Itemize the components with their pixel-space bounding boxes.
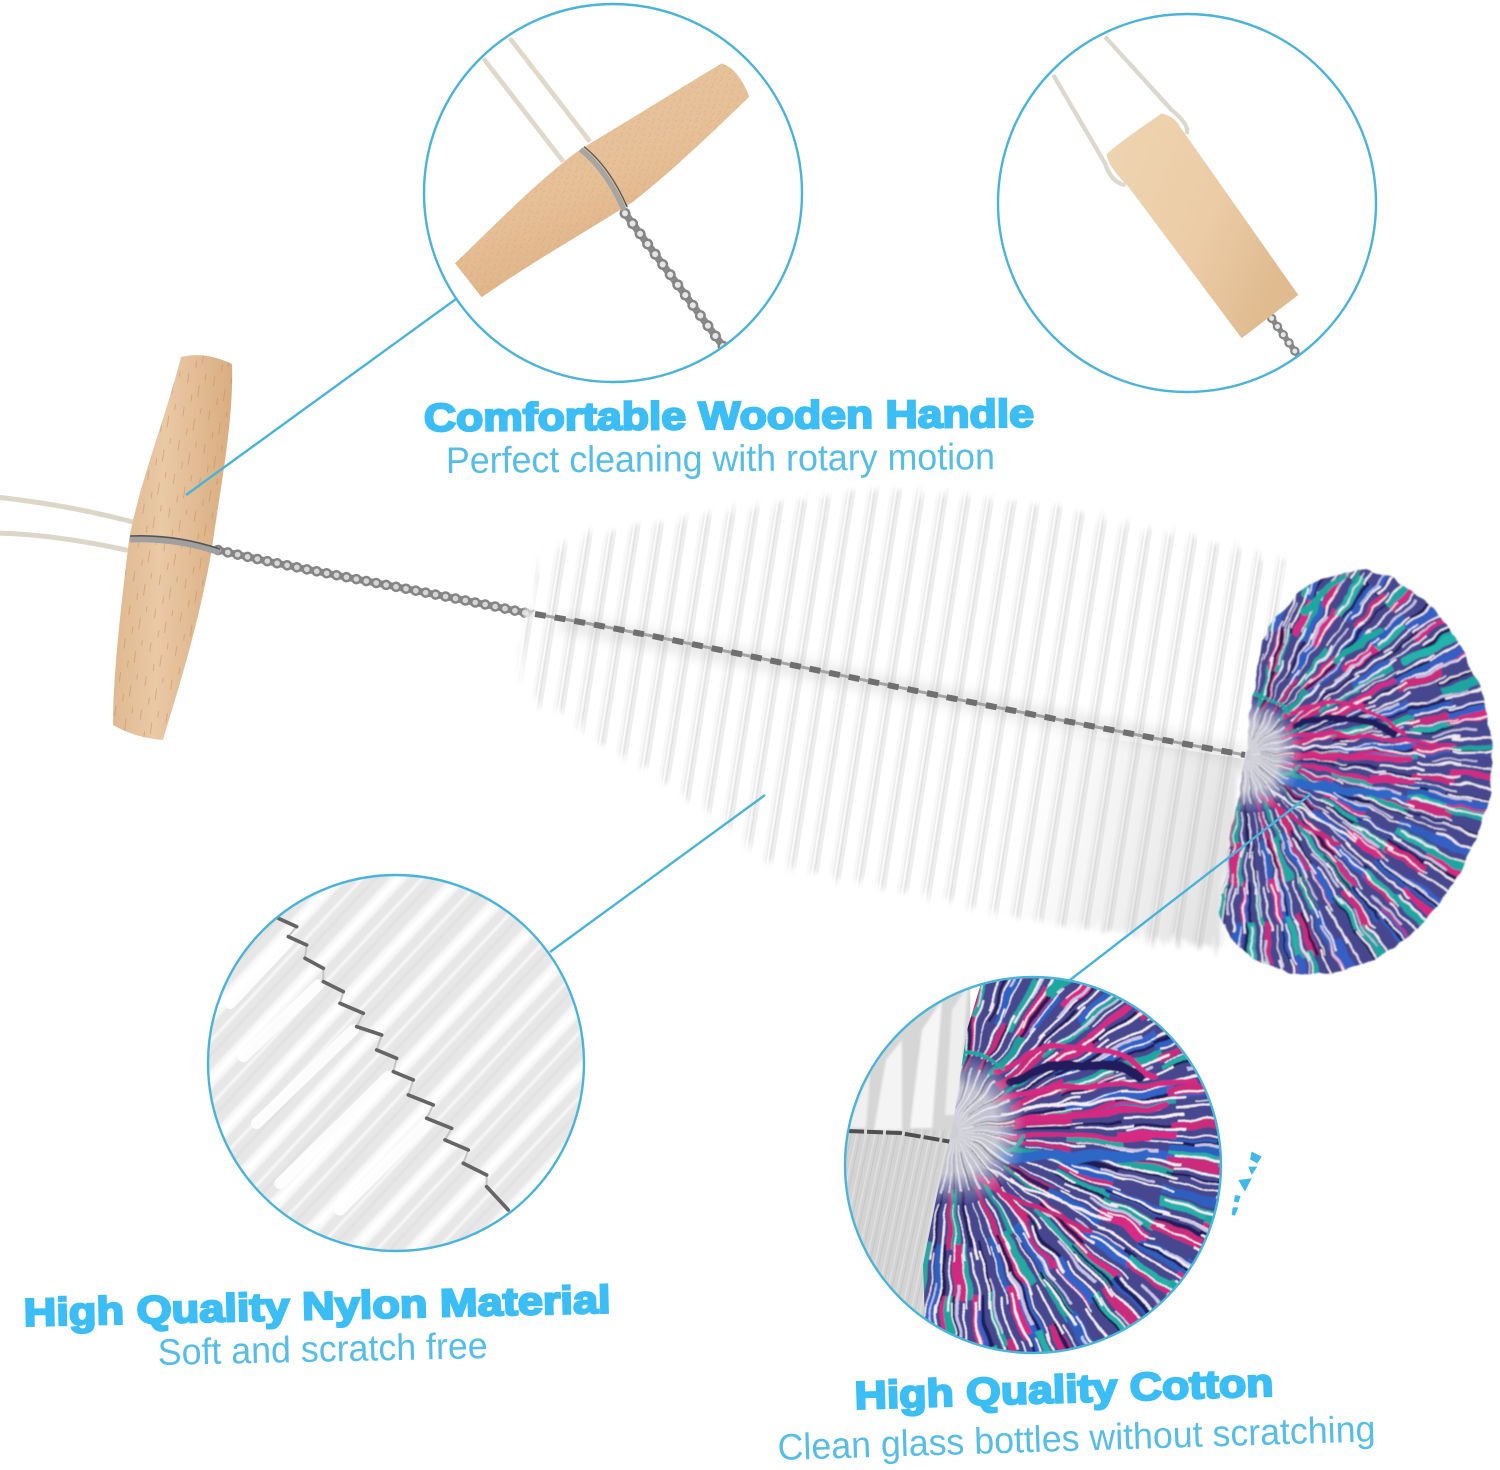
- bright bands below wire: [230, 942, 427, 1210]
- leader line: nylon: [550, 795, 765, 952]
- callout: nylon material: [23, 1279, 611, 1373]
- wood: [455, 63, 749, 297]
- subheading: Perfect cleaning with rotary motion: [446, 436, 995, 481]
- main brush wooden handle: [113, 355, 232, 740]
- metal ring: [130, 539, 220, 552]
- rope: [1053, 37, 1187, 185]
- wood: [1107, 113, 1298, 338]
- wire: [1272, 318, 1300, 358]
- rope loop of main brush: [0, 497, 133, 550]
- pompom strands: [923, 978, 1220, 1352]
- heading: High Quality Nylon Material: [23, 1279, 611, 1335]
- circle: handle closeup angled view: [424, 4, 802, 382]
- twisted core wire: [535, 614, 1245, 755]
- small blue artefact marks: [1232, 1152, 1262, 1216]
- main brush wire shaft: [218, 550, 540, 616]
- circle: cotton closeup: [844, 976, 1222, 1354]
- ring: [581, 149, 624, 210]
- leader line: cotton: [1070, 794, 1311, 980]
- upper bristles: [850, 989, 971, 1131]
- subheading: Soft and scratch free: [157, 1325, 488, 1373]
- core wire: [848, 1131, 952, 1142]
- heading: Comfortable Wooden Handle: [424, 393, 1034, 440]
- subheading: Clean glass bottles without scratching: [777, 1408, 1376, 1468]
- leader line: handle: [186, 299, 456, 495]
- multicolour cotton pompom tip: [1218, 568, 1494, 976]
- wire: [625, 213, 723, 347]
- rope: [483, 38, 590, 162]
- callout: cotton: [777, 1362, 1376, 1468]
- circle: nylon closeup: [200, 870, 595, 1260]
- shadow along wire: [560, 622, 1245, 755]
- circle: handle closeup end view: [998, 14, 1376, 392]
- white nylon bristle body: [521, 488, 1286, 954]
- heading: High Quality Cotton: [854, 1362, 1274, 1418]
- callout: wooden handle: [424, 393, 1034, 481]
- twisted wire: [278, 918, 508, 1210]
